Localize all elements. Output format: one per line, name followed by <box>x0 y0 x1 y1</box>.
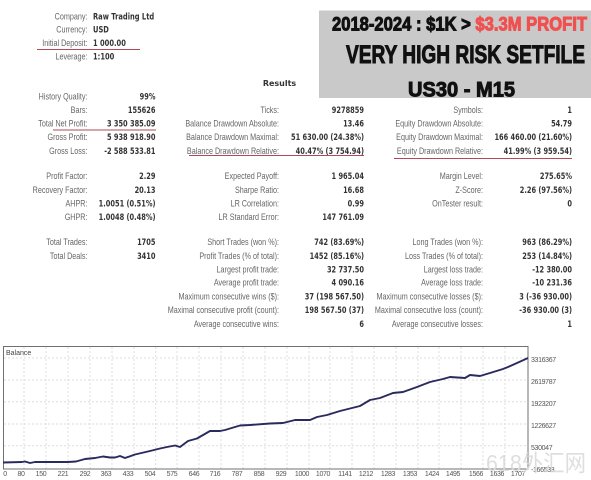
results labels column 2: Balance Drawdown Absolute: <box>185 119 279 129</box>
x axis labels: 1000 <box>295 471 310 478</box>
results labels column 3: OnTester result: <box>432 199 483 209</box>
account info labels: Company: <box>55 12 88 22</box>
results values column 3 <box>494 105 572 329</box>
results labels column 2 <box>168 105 279 329</box>
results labels column 1: History Quality: <box>39 92 88 102</box>
results labels column 3: Average loss trade: <box>421 278 483 288</box>
chart frame <box>4 346 528 469</box>
red highlight underlines <box>37 50 572 158</box>
account info labels: Leverage: <box>55 52 88 62</box>
account info labels: Initial Deposit: <box>42 38 88 48</box>
results labels column 3: Margin Level: <box>440 171 483 181</box>
x axis labels: 787 <box>232 471 243 478</box>
results labels column 1: AHPR: <box>65 199 88 209</box>
results labels column 1: Gross Profit: <box>47 132 88 142</box>
y axis labels: 1226627 <box>531 423 556 430</box>
y axis labels: 530047 <box>531 445 553 452</box>
results values column 1: 1705 <box>137 237 156 247</box>
results labels column 2: LR Correlation: <box>231 199 279 209</box>
results values column 2: 147 761.09 <box>322 212 364 222</box>
results values column 1: 99% <box>140 92 156 102</box>
watermark: 618外汇网 <box>486 450 586 476</box>
results values column 3: -10 231.36 <box>532 278 572 288</box>
results values column 1: 3 350 385.09 <box>107 119 156 129</box>
results labels column 1: Total Trades: <box>46 237 88 247</box>
results values column 2: 198 567.50 (37) <box>305 305 364 315</box>
results values column 2: 16.68 <box>343 185 364 195</box>
results labels column 1: Gross Loss: <box>49 146 88 156</box>
banner line 3: US30 - M15 <box>408 78 515 102</box>
x axis labels: 433 <box>123 471 134 478</box>
results labels column 3: Maximum consecutive losses ($): <box>377 292 483 302</box>
results labels column 3: Maximal consecutive loss (count): <box>375 305 483 315</box>
x axis labels: 858 <box>254 471 265 478</box>
results values column 2: 51 630.00 (24.38%) <box>291 132 364 142</box>
results heading: Results <box>263 79 296 88</box>
x axis labels: 0 <box>3 471 7 478</box>
results values column 1: 20.13 <box>135 185 156 195</box>
x axis labels: 1495 <box>446 471 461 478</box>
chart title: Balance <box>6 350 31 357</box>
results labels column 2: LR Standard Error: <box>219 212 279 222</box>
results values column 1: 2.29 <box>139 171 156 181</box>
results values column 1: 155626 <box>128 105 156 115</box>
x axis labels: 1283 <box>381 471 396 478</box>
x axis labels: 1636 <box>490 471 505 478</box>
results labels column 2: Profit Trades (% of total): <box>199 251 279 261</box>
results values column 2: 9278859 <box>332 105 364 115</box>
balance chart <box>3 346 556 478</box>
balance line <box>3 358 528 463</box>
x axis labels: 646 <box>189 471 200 478</box>
results values column 2: 6 <box>359 319 364 329</box>
results labels column 3: Symbols: <box>453 105 483 115</box>
y axis labels <box>531 357 556 474</box>
results labels column 3: Largest loss trade: <box>424 265 483 275</box>
account info labels <box>42 12 88 62</box>
x axis labels: 716 <box>210 471 221 478</box>
results values column 3: 963 (86.29%) <box>522 237 572 247</box>
x axis labels: 292 <box>80 471 91 478</box>
x axis labels: 221 <box>58 471 69 478</box>
results labels column 1: Total Deals: <box>50 251 88 261</box>
account info labels: Currency: <box>56 25 88 35</box>
x axis labels <box>3 471 526 478</box>
results labels column 2: Expected Payoff: <box>225 171 279 181</box>
x axis labels: 575 <box>167 471 178 478</box>
x axis labels: 1353 <box>403 471 418 478</box>
account info values: 1:100 <box>93 52 114 62</box>
results values column 3: 2.26 (97.56%) <box>520 185 572 195</box>
results values column 1: 1.0048 (0.48%) <box>99 212 156 222</box>
x axis labels: 80 <box>17 471 25 478</box>
results labels column 3: Long Trades (won %): <box>413 237 483 247</box>
results labels column 3: Average consecutive losses: <box>392 319 483 329</box>
y axis labels: 1923207 <box>531 401 556 408</box>
results values column 2: 4 090.16 <box>332 278 364 288</box>
results labels column 2: Balance Drawdown Maximal: <box>186 132 279 142</box>
results labels column 1: GHPR: <box>65 212 88 222</box>
results values column 3: 54.79 <box>551 119 572 129</box>
account info values <box>93 12 154 62</box>
results labels column 2: Average consecutive wins: <box>194 319 279 329</box>
results labels column 2: Maximum consecutive wins ($): <box>179 292 279 302</box>
results labels column 3: Z-Score: <box>455 185 483 195</box>
results labels column 1: Profit Factor: <box>46 171 88 181</box>
results values column 3: -12 380.00 <box>532 265 572 275</box>
x axis labels: 1566 <box>469 471 484 478</box>
results labels column 3: Equity Drawdown Absolute: <box>395 119 483 129</box>
results labels column 2: Balance Drawdown Relative: <box>187 146 279 156</box>
y axis labels: -166533 <box>531 467 555 474</box>
results values column 1: 1.0051 (0.51%) <box>99 199 156 209</box>
y axis labels: 3316367 <box>531 357 556 364</box>
results values column 3: 41.99% (3 959.54) <box>504 146 572 156</box>
results labels column 2: Short Trades (won %): <box>207 237 279 247</box>
results labels column 2: Sharpe Ratio: <box>235 185 279 195</box>
results values column 3: 1 <box>567 105 572 115</box>
x axis labels: 1212 <box>359 471 374 478</box>
results labels column 3: Loss Trades (% of total): <box>405 251 483 261</box>
y axis labels: 2619787 <box>531 379 556 386</box>
results values column 2: 40.47% (3 754.94) <box>296 146 364 156</box>
headline banner <box>319 10 591 102</box>
x axis labels: 1707 <box>511 471 526 478</box>
results labels column 1: Recovery Factor: <box>33 185 88 195</box>
results values column 3: 166 460.00 (21.60%) <box>494 132 572 142</box>
results values column 3: 1 <box>567 319 572 329</box>
results values column 2: 742 (83.69%) <box>314 237 364 247</box>
results values column 3: 3 (-36 930.00) <box>519 292 572 302</box>
x axis labels: 929 <box>276 471 287 478</box>
results values column 2: 0.99 <box>348 199 364 209</box>
results values column 2: 32 737.50 <box>327 265 364 275</box>
results values column 2: 13.46 <box>343 119 364 129</box>
results labels column 2: Maximal consecutive profit (count): <box>168 305 279 315</box>
results values column 1: -2 588 533.81 <box>104 146 156 156</box>
x axis labels: 1424 <box>425 471 440 478</box>
results values column 2: 1452 (85.16%) <box>310 251 364 261</box>
results labels column 2: Average profit trade: <box>214 278 279 288</box>
results values column 1: 3410 <box>137 251 156 261</box>
chart grid <box>4 347 528 469</box>
results labels column 2: Ticks: <box>260 105 279 115</box>
results labels column 1 <box>33 92 88 261</box>
account info values: Raw Trading Ltd <box>93 12 154 22</box>
results values column 3: 253 (14.84%) <box>522 251 572 261</box>
results labels column 2: Largest profit trade: <box>217 265 279 275</box>
results labels column 3: Equity Drawdown Maximal: <box>396 132 483 142</box>
results values column 2 <box>291 105 364 329</box>
results labels column 1: Bars: <box>71 105 88 115</box>
x axis labels: 504 <box>145 471 156 478</box>
results values column 3: 0 <box>567 199 572 209</box>
results values column 3: -36 930.00 (3) <box>519 305 572 315</box>
account info values: USD <box>93 25 109 35</box>
results values column 2: 1 965.04 <box>332 171 364 181</box>
results labels column 1: Total Net Profit: <box>38 119 88 129</box>
results values column 1: 5 938 918.90 <box>107 132 156 142</box>
results values column 2: 37 (198 567.50) <box>305 292 364 302</box>
x axis labels: 363 <box>101 471 112 478</box>
x axis labels: 1141 <box>338 471 352 478</box>
results values column 3: 275.65% <box>540 171 572 181</box>
x axis labels: 150 <box>36 471 47 478</box>
account info values: 1 000.00 <box>93 38 126 48</box>
results values column 1 <box>99 92 156 261</box>
x axis labels: 1070 <box>316 471 331 478</box>
results labels column 3 <box>375 105 483 329</box>
results labels column 3: Equity Drawdown Relative: <box>397 146 483 156</box>
